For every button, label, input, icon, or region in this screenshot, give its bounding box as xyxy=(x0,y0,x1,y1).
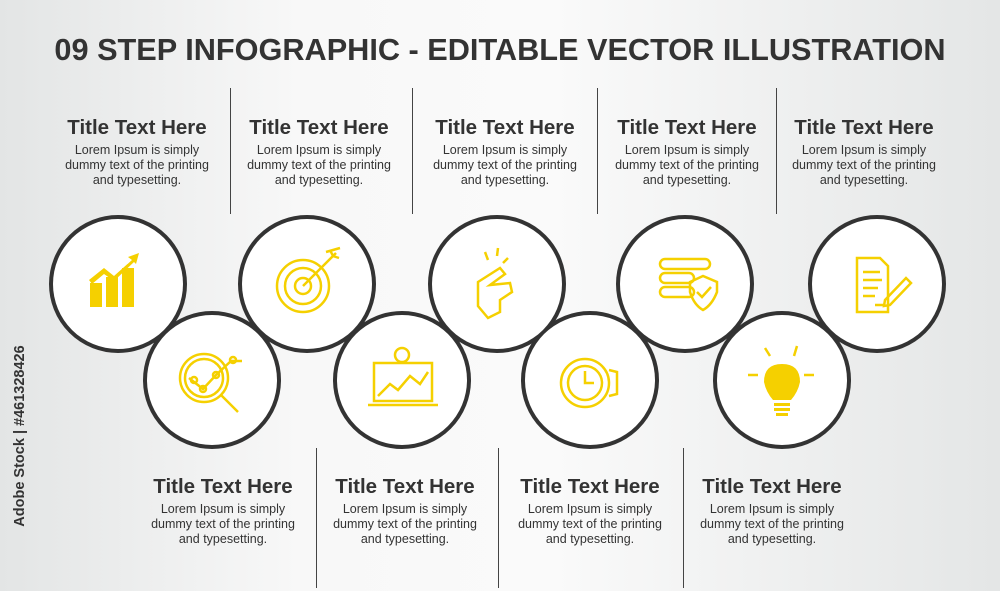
text: step 1: Title Text Here xyxy=(67,116,207,139)
icon: snap fingers xyxy=(478,248,512,318)
text: step 8: Lorem Ipsum is simply dummy text of the printing and typesetting. xyxy=(700,502,844,546)
icon: growth chart xyxy=(89,253,139,307)
icon: document pen xyxy=(857,258,911,312)
icon: target xyxy=(277,248,340,312)
icon: magnifier analytics xyxy=(180,354,242,412)
icon: clock gear xyxy=(561,359,617,407)
icon: light bulb xyxy=(748,346,814,416)
title: 09 STEP INFOGRAPHIC - EDITABLE VECTOR ILLUSTRATION xyxy=(54,32,946,67)
text: step 6: Lorem Ipsum is simply dummy text of the printing and typesetting. xyxy=(518,502,662,546)
text: step 1: Lorem Ipsum is simply dummy text of the printing and typesetting. xyxy=(65,143,209,187)
text: step 8: Title Text Here xyxy=(702,475,842,498)
text: step 4: Lorem Ipsum is simply dummy text of the printing and typesetting. xyxy=(333,502,477,546)
watermark id: Adobe Stock | #461328426 xyxy=(12,345,28,527)
text: step 7 xyxy=(615,116,759,187)
text: step 4: Title Text Here xyxy=(335,475,475,498)
text: step 9: Title Text Here xyxy=(794,116,934,139)
text: step 7: Title Text Here xyxy=(617,116,757,139)
text: step 9: Lorem Ipsum is simply dummy text of the printing and typesetting. xyxy=(792,143,936,187)
text: step 6: Title Text Here xyxy=(520,475,660,498)
text: step 5: Lorem Ipsum is simply dummy text of the printing and typesetting. xyxy=(433,143,577,187)
text: step 6 xyxy=(518,475,662,546)
text: step 3: Lorem Ipsum is simply dummy text of the printing and typesetting. xyxy=(247,143,391,187)
text: step 5: Title Text Here xyxy=(435,116,575,139)
icon: server shield xyxy=(660,259,717,310)
icon: laptop gear xyxy=(368,348,438,405)
text: step 2: Title Text Here xyxy=(153,475,293,498)
text: step 7: Lorem Ipsum is simply dummy text of the printing and typesetting. xyxy=(615,143,759,187)
text: step 2: Lorem Ipsum is simply dummy text of the printing and typesetting. xyxy=(151,502,295,546)
text: step 9 xyxy=(792,116,936,187)
text: step 2 xyxy=(151,475,295,546)
text: step 3 xyxy=(247,116,391,187)
text: step 8 xyxy=(700,475,844,546)
text: step 1 xyxy=(65,116,209,187)
text: step 3: Title Text Here xyxy=(249,116,389,139)
text: step 5 xyxy=(433,116,577,187)
text: step 4 xyxy=(333,475,477,546)
